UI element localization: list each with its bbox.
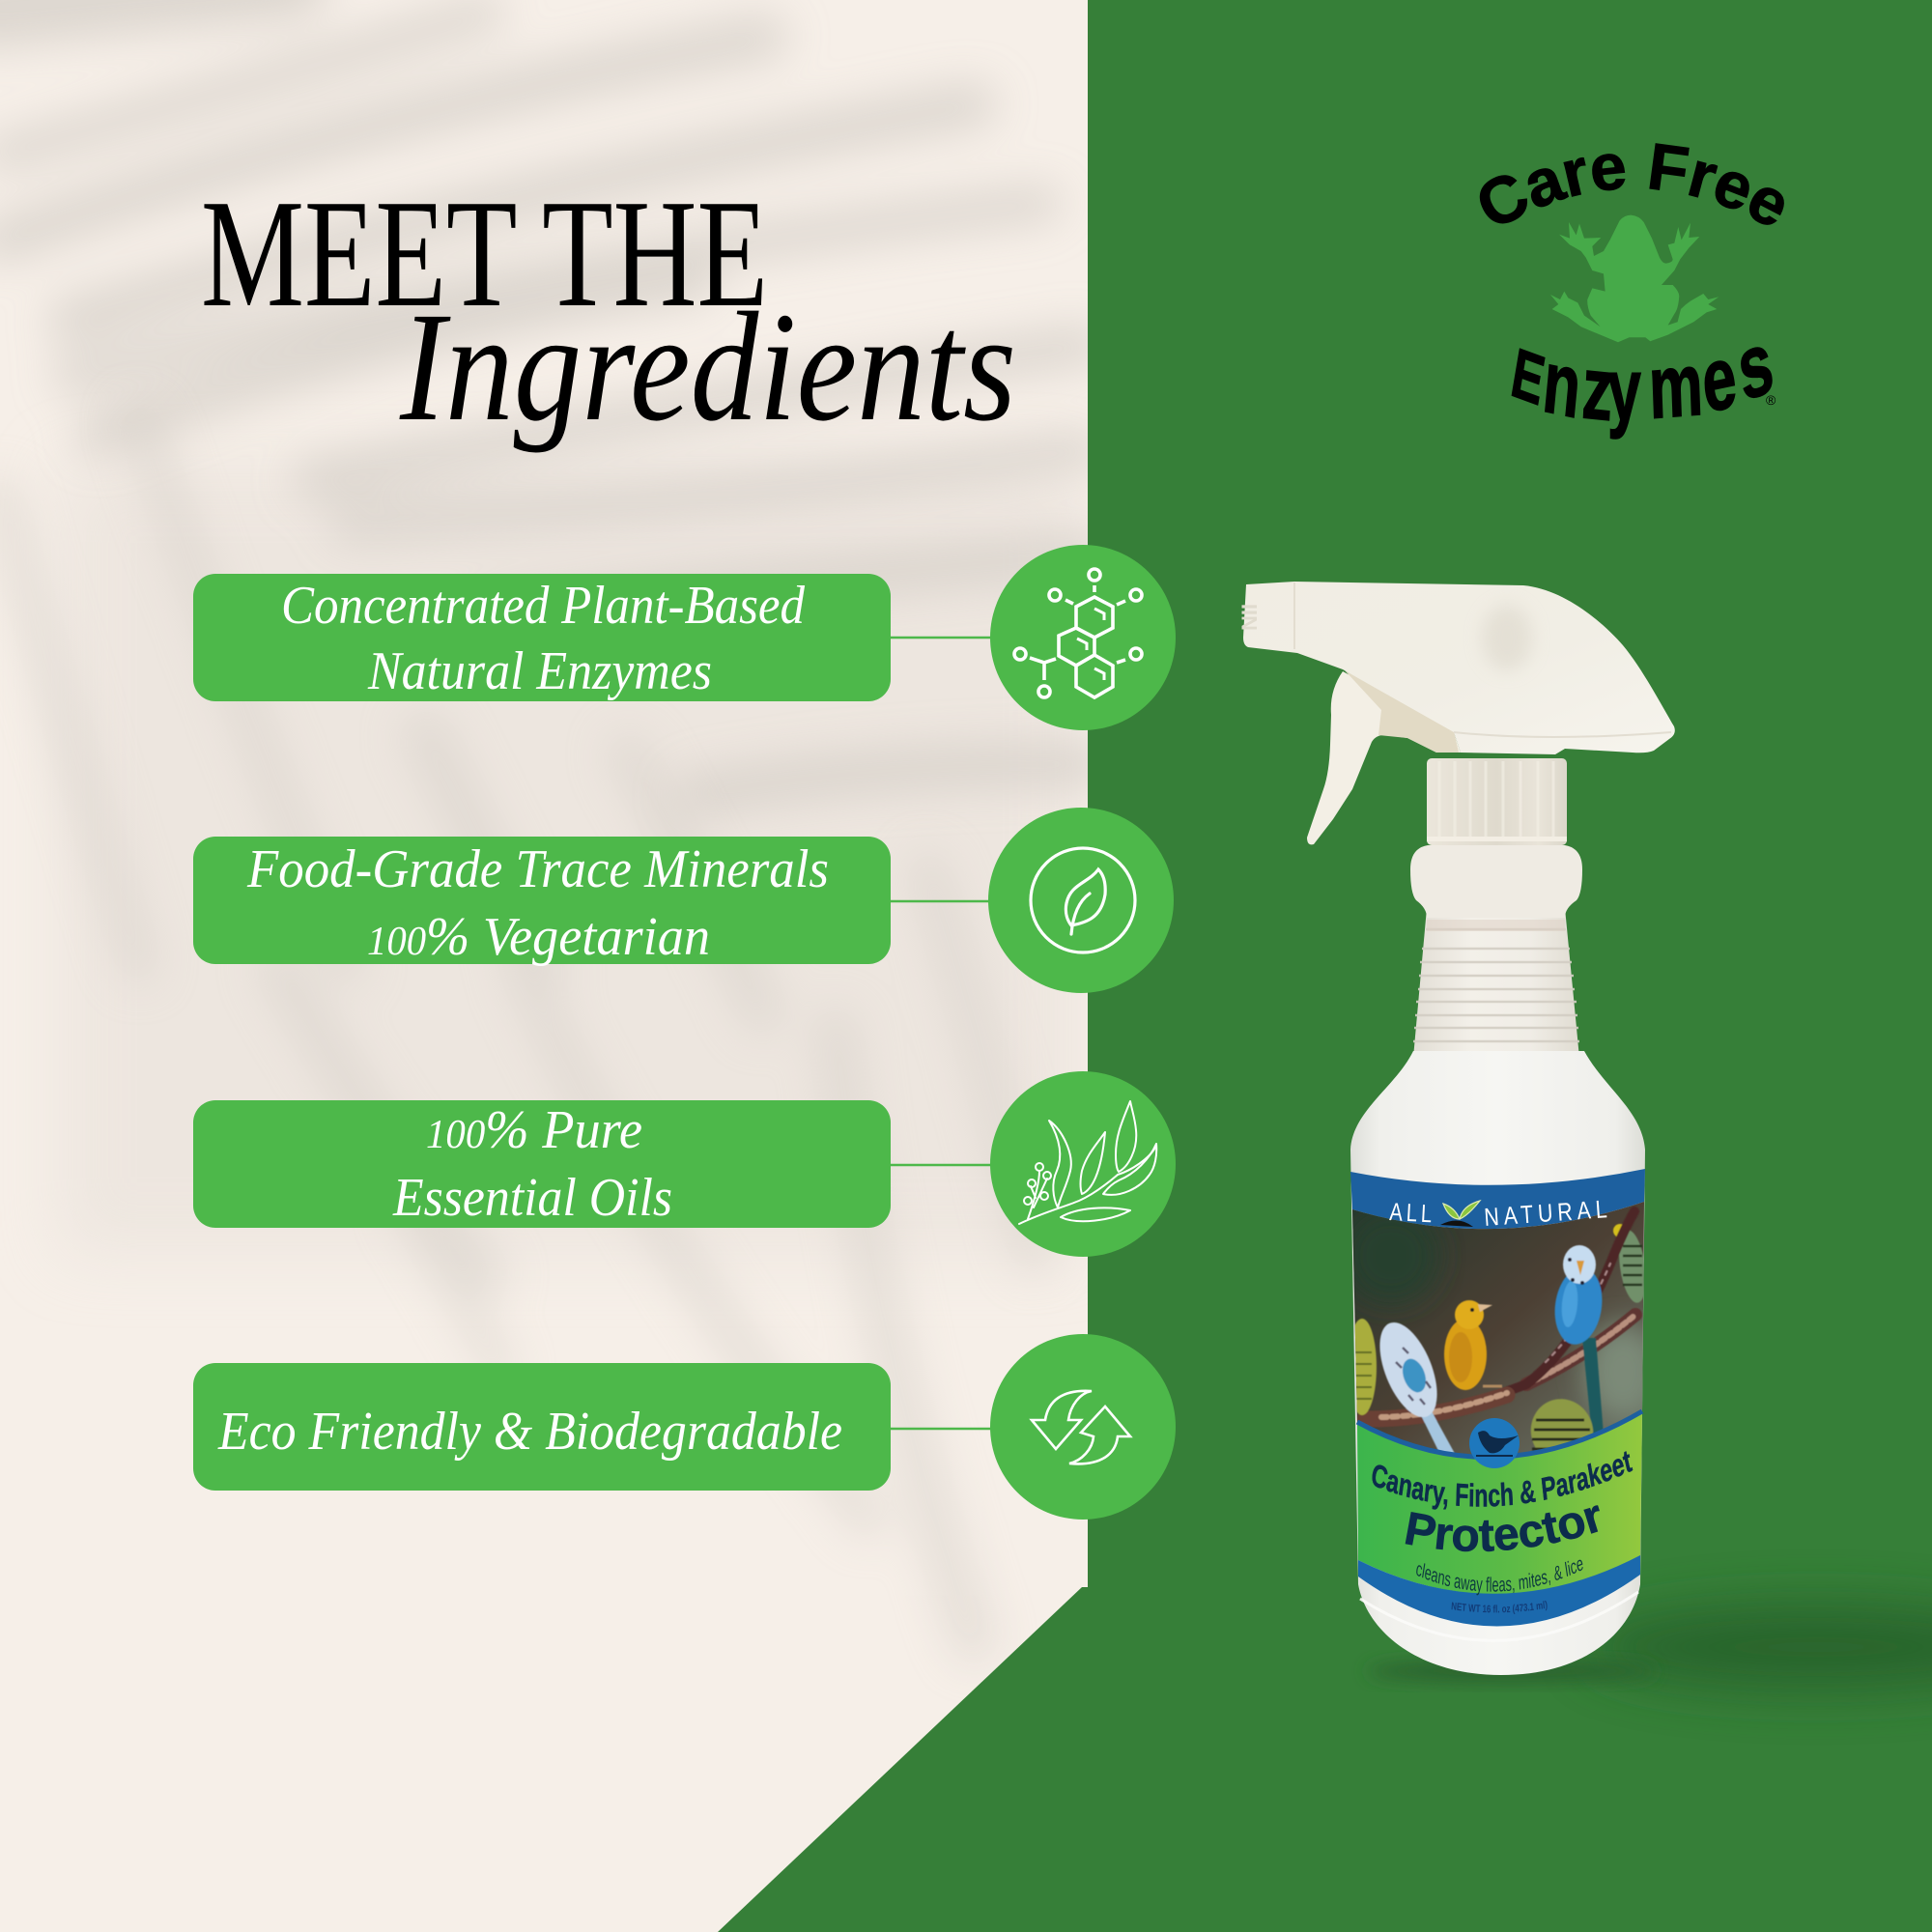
heading: MEET THE: MEET THE	[201, 167, 768, 339]
item 3: oils pill	[193, 1100, 995, 1228]
bird: white parakeet	[1379, 1321, 1455, 1453]
icon: leaf in ring	[988, 808, 1174, 993]
label: bottom blue band	[1358, 1555, 1640, 1627]
item 2: minerals pill: 100% Vegetarian	[367, 907, 710, 967]
label: blue rule	[1357, 1411, 1642, 1457]
bottle base ridge	[1360, 1592, 1638, 1640]
label text: Canary, Finch & Parakeet: Canary, Finch & Parakeet	[1372, 1451, 1633, 1510]
bird: top right parakeet	[1612, 1223, 1644, 1303]
bird: blue parakeet	[1553, 1244, 1604, 1434]
item 1: enzymes pill: Natural Enzymes	[367, 641, 712, 701]
item 2: minerals pill: Food-Grade Trace Minerals	[246, 839, 829, 899]
logo icon: frog	[1550, 215, 1719, 342]
logo text: Enzymes: Enzymes	[1506, 312, 1779, 440]
title	[201, 167, 1016, 454]
bottle neck ribbed	[1413, 908, 1579, 1058]
sprayer head	[1237, 582, 1675, 754]
item 2: minerals pill	[193, 837, 995, 967]
panel: cream background with palm shadow	[0, 0, 1092, 1932]
label: bird photo	[1352, 1202, 1644, 1455]
item 4: eco pill	[193, 1363, 995, 1491]
trigger	[1307, 671, 1461, 844]
logo: Care Free Enzymes	[1480, 143, 1784, 440]
label: ALL NATURAL: ALL	[1389, 1198, 1436, 1228]
bird: left green parakeet	[1354, 1318, 1378, 1416]
label text: cleans away: cleans away fleas, mites, & lice	[1416, 1559, 1583, 1596]
branches	[1365, 1211, 1635, 1419]
item 4: eco pill: Eco Friendly & Biodegradable	[217, 1402, 842, 1462]
collar	[1427, 758, 1567, 845]
label: green panel	[1357, 1411, 1642, 1594]
icon: recycle arrows	[990, 1334, 1176, 1520]
label: ALL NATURAL: NATURAL	[1483, 1195, 1612, 1233]
label: bird badge	[1469, 1418, 1520, 1468]
bird: yellow canary	[1444, 1300, 1502, 1390]
label: top blue band	[1350, 1169, 1645, 1229]
label: ALL NATURAL	[1389, 1195, 1612, 1233]
sprayer head: NII	[1237, 604, 1262, 631]
under-head wedge	[1345, 670, 1459, 753]
item 1: enzymes pill: Concentrated Plant-Based	[281, 576, 806, 636]
logo text: Care Free: Care Free	[1480, 143, 1784, 225]
bird: lower green parakeet	[1530, 1399, 1594, 1451]
shadow: bottle cast shadow	[1367, 1605, 1932, 1690]
item 1: enzymes pill	[193, 574, 995, 701]
neck ring	[1410, 845, 1582, 918]
heading: Ingredients: Ingredients	[399, 281, 1016, 454]
bottle body	[1350, 1051, 1645, 1675]
label text: Protector: Protector	[1405, 1505, 1600, 1551]
icon: molecule	[990, 545, 1176, 730]
label text: net weight: NET WT 16 fl. oz (473.1 ml)	[1451, 1601, 1548, 1614]
icon: botanical sprig	[990, 1071, 1176, 1257]
item 3: oils pill: Essential Oils	[392, 1168, 672, 1228]
product: spray bottle	[1237, 582, 1675, 1675]
registered mark: ®	[1766, 392, 1776, 408]
item 3: oils pill: 100% Pure	[426, 1100, 642, 1160]
